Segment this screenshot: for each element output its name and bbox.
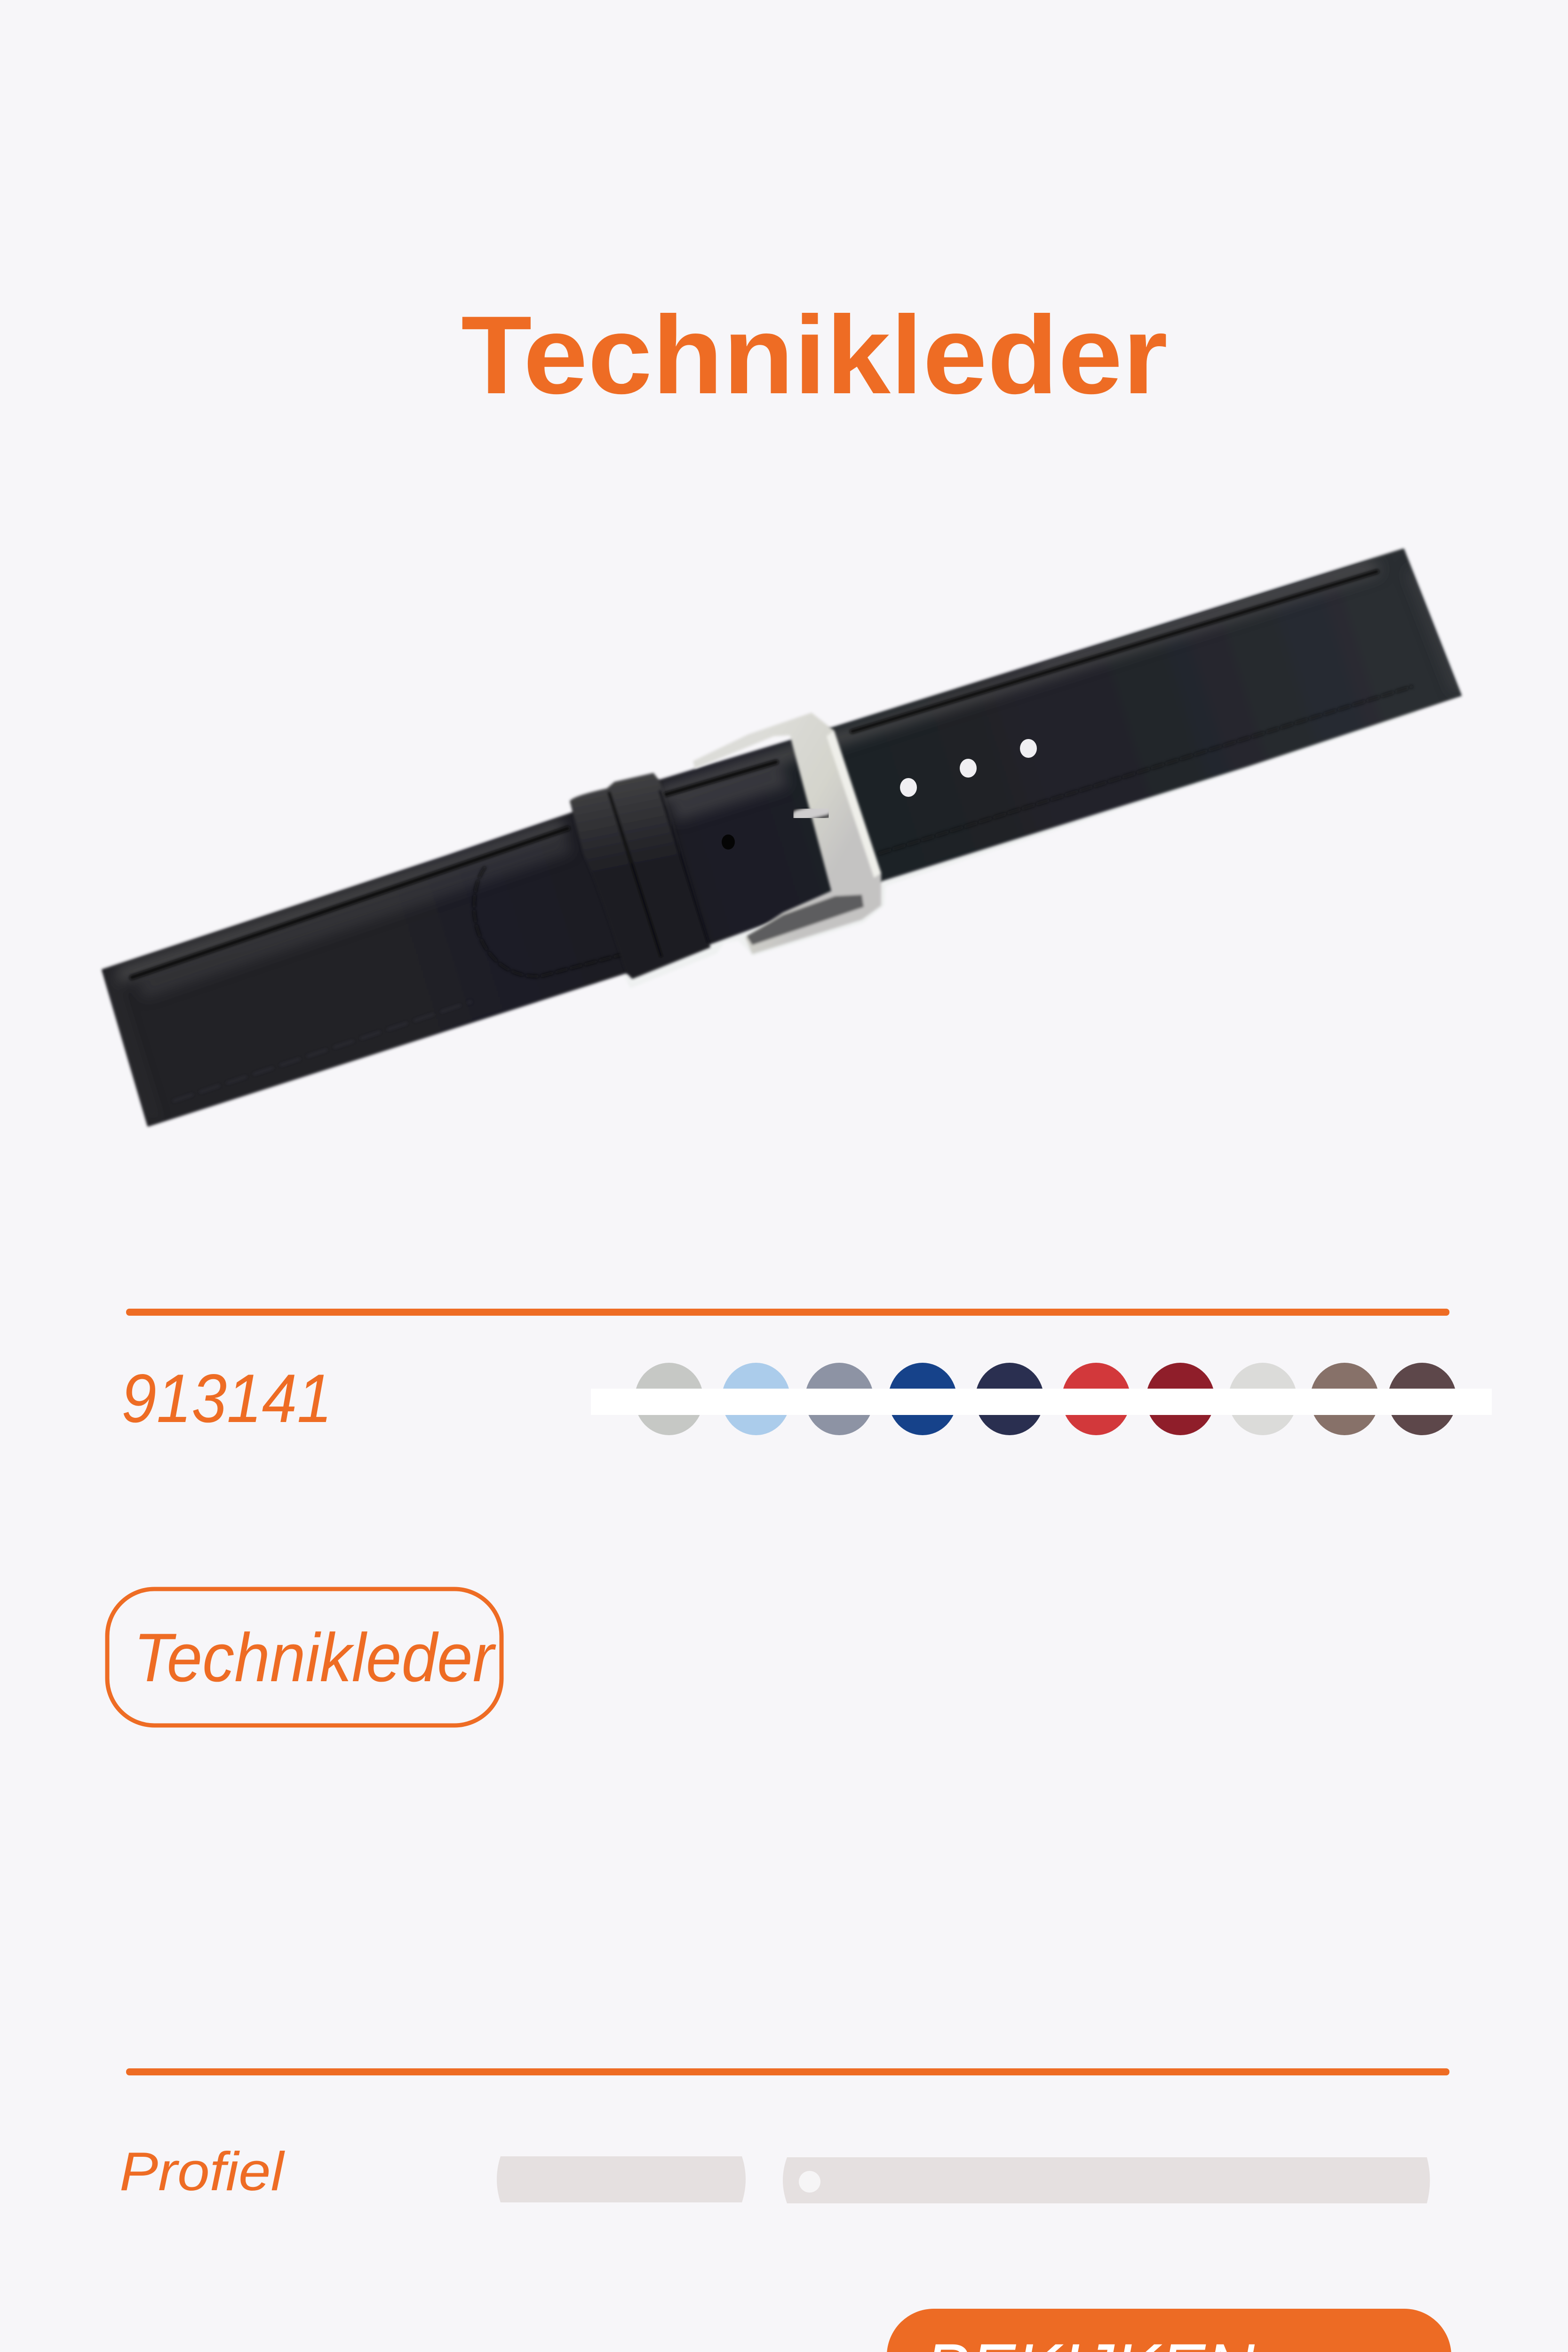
buckle frame <box>693 713 881 954</box>
white band over swatches <box>591 1389 1492 1415</box>
white halo around strap underside <box>622 708 1416 988</box>
view button <box>887 2309 1451 2352</box>
colour swatches <box>591 1363 1492 1435</box>
buckle pin <box>795 809 827 818</box>
divider line bottom <box>126 2068 1449 2075</box>
long strap piece <box>783 2157 1430 2203</box>
strap hole <box>799 2171 820 2193</box>
title: Technikleder <box>461 293 1168 417</box>
strap shading and stitching <box>113 561 1454 995</box>
short strap piece <box>497 2156 746 2202</box>
divider line top <box>126 1309 1449 1316</box>
strap keeper loop <box>570 773 710 979</box>
strap body <box>103 549 1461 1126</box>
material tag label: Technikleder <box>134 1619 496 1696</box>
watch strap photo <box>103 549 1461 1126</box>
strap holes <box>722 739 1037 850</box>
article number: 913141 <box>121 1360 332 1437</box>
material tag <box>107 1589 501 1725</box>
strap profile diagram <box>497 2156 1430 2203</box>
profile label: Profiel <box>119 2141 285 2202</box>
